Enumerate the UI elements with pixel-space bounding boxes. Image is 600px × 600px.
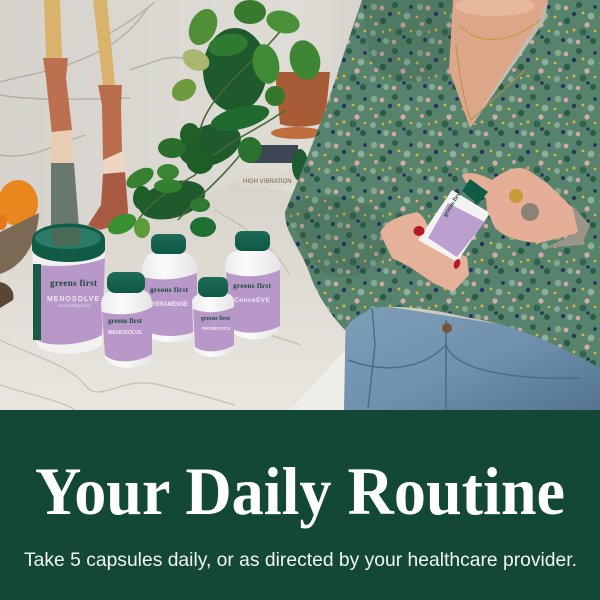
- label: [102, 307, 152, 361]
- watch band: [545, 205, 590, 248]
- potted plant: [105, 0, 330, 238]
- photo: lifestyle scene: [0, 0, 600, 410]
- text: greens first: [201, 316, 230, 322]
- stacked books: [248, 145, 298, 163]
- candle holder left: [43, 0, 79, 228]
- right hand: [462, 168, 580, 243]
- label: [226, 270, 280, 333]
- candle left: [44, 0, 62, 58]
- cap: [151, 234, 186, 254]
- potted plant: HIGH VIBRATION: [243, 179, 292, 185]
- counter front edge: [290, 345, 350, 410]
- label: [193, 307, 234, 351]
- product: small Menosolve bottle: [101, 272, 152, 368]
- product: Feramense bottle: FERAMENSE: [152, 302, 188, 308]
- product: Feramense bottle: [142, 234, 197, 342]
- leaves: [105, 0, 325, 238]
- bottle cap: [462, 179, 488, 204]
- blouse shading: [285, 0, 456, 278]
- text: greens first: [150, 285, 188, 294]
- bottle label text: greens first: [443, 191, 463, 218]
- text: greens first: [108, 317, 143, 325]
- bottle label: [428, 203, 485, 257]
- counter veining: [0, 210, 300, 410]
- text: greens first: [233, 281, 272, 290]
- product: small Menosolve bottle: MENOSOLVE: [108, 330, 142, 336]
- product: probiotics bottle: [192, 277, 234, 357]
- product: large Menosolve tub: MENOSOLVE: [47, 296, 99, 303]
- title: Your Daily Routine: [35, 453, 565, 529]
- jeans: [344, 300, 600, 410]
- label: [143, 273, 197, 336]
- bowl: [0, 213, 39, 274]
- banner panel: [0, 410, 600, 600]
- bowl of oranges: [0, 180, 39, 308]
- rings: [509, 189, 523, 203]
- stems: [135, 25, 285, 225]
- cap: [235, 231, 270, 251]
- marble wall: [0, 0, 600, 410]
- tub lid: [32, 224, 105, 262]
- person: [285, 0, 600, 410]
- left hand: [380, 212, 469, 292]
- held bottle: [418, 190, 490, 262]
- product: ConceEVE bottle: ConceEVE: [234, 297, 271, 304]
- oranges: [0, 180, 38, 226]
- necklaces: [460, 20, 540, 39]
- instruction text: Take 5 capsules daily, or as directed by your healthcare provider.: [24, 549, 577, 571]
- floral blouse: [285, 0, 600, 368]
- product: large Menosolve tub: PLUS PROBIOTICS: [59, 304, 91, 308]
- product: probiotics bottle: PROBIOTICS: [202, 326, 230, 331]
- product: large Menosolve tub: [32, 224, 105, 354]
- candle right: [93, 0, 115, 85]
- holder right terracotta: [98, 85, 122, 160]
- terracotta pot: [275, 72, 330, 127]
- product: ConceEVE bottle: [225, 231, 280, 339]
- tub label: [33, 258, 105, 345]
- cap: [198, 277, 228, 297]
- tub label text: greens first: [50, 278, 97, 288]
- marble countertop: [0, 180, 350, 410]
- holder left terracotta: [43, 58, 72, 135]
- nail polish: [414, 226, 424, 236]
- candle holder right: [88, 0, 128, 230]
- neckline skin: [449, 0, 548, 127]
- foliage mass: [134, 28, 267, 226]
- marble veining on wall: [0, 2, 200, 156]
- cap: [107, 272, 145, 293]
